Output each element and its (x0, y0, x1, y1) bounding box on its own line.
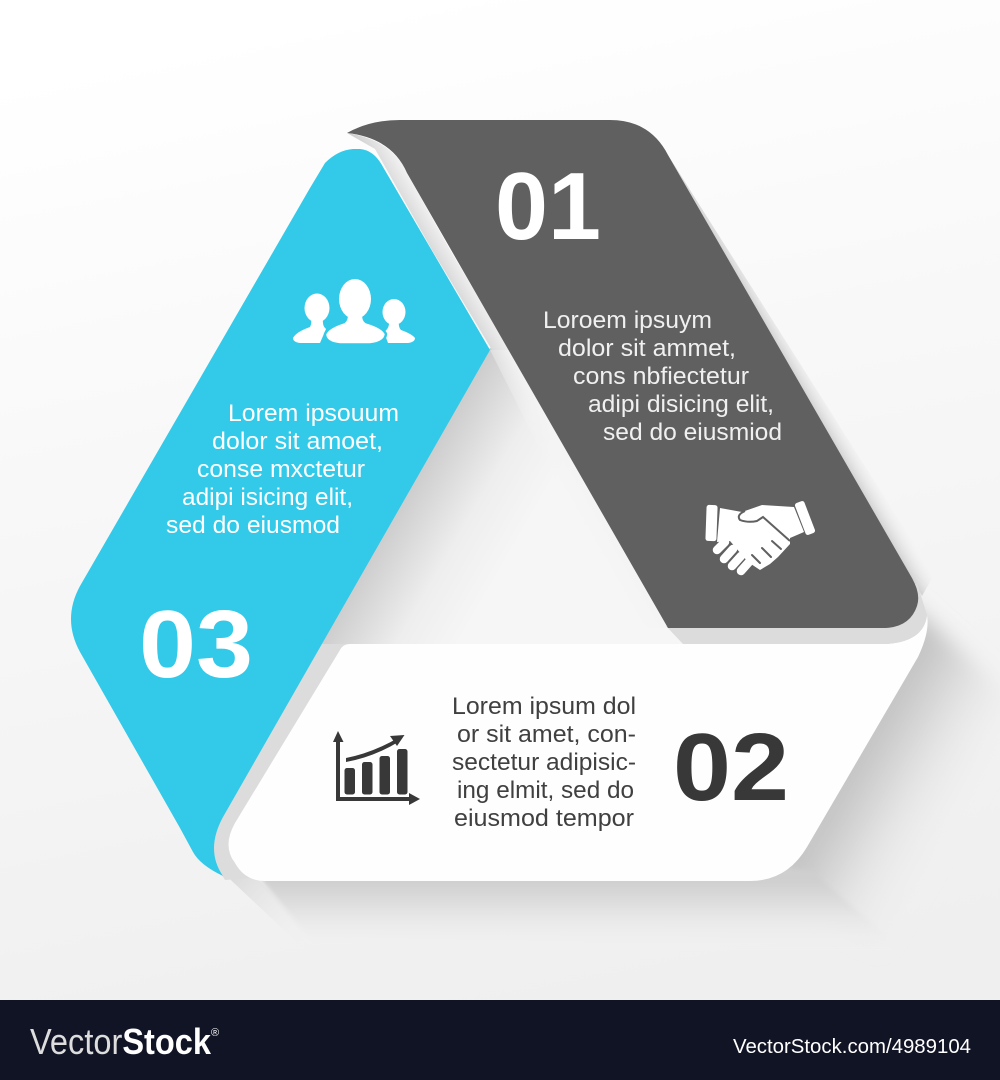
text block 02: eiusmod tempor (454, 805, 634, 832)
band: fold under dark segment (666, 583, 927, 644)
image id: VectorStock.com/4989104 (733, 1036, 971, 1058)
text block 01: Loroem ipsuym (543, 307, 712, 334)
icon: three people (293, 279, 415, 344)
registered mark: ® (211, 1027, 219, 1039)
band: fold beside white segment (212, 644, 350, 880)
number 02: 02 (673, 714, 789, 821)
text block 03: conse mxctetur (197, 456, 365, 483)
band: fold between blue and dark segments (347, 133, 510, 350)
number 03: 03 (139, 591, 253, 698)
panel 02: white segment (228, 583, 928, 881)
shadow: trailing tail at lower left (216, 858, 330, 950)
text block 01: dolor sit ammet, (558, 335, 736, 362)
icon: handshake (705, 500, 816, 571)
number 01: 01 (495, 153, 601, 260)
text block 01: adipi disicing elit, (588, 391, 774, 418)
text block 03: dolor sit amoet, (212, 428, 383, 455)
footer bar (0, 1000, 1000, 1080)
logo wordmark: VectorStock (30, 1021, 212, 1062)
text block 02: ing elmit, sed do (457, 777, 634, 804)
inner triangle shadow (318, 348, 684, 644)
shadow: right of dark segment (668, 155, 934, 596)
text block 03 (166, 400, 399, 539)
icon: bar chart with arrow (333, 731, 420, 805)
text block 02: sectetur adipisic- (452, 749, 636, 776)
text block 03: Lorem ipsouum (228, 400, 399, 427)
shadow: below white segment (253, 870, 905, 952)
panel 03: blue segment (71, 149, 490, 876)
text block 01: sed do eiusmiod (603, 419, 782, 446)
shadow: right of white segment (760, 590, 1000, 950)
inner triangle highlight along dark segment (490, 350, 668, 628)
text block 03: adipi isicing elit, (182, 484, 353, 511)
text block 03: sed do eiusmod (166, 512, 340, 539)
text block 01 (543, 307, 782, 446)
text block 01: cons nbfiectetur (573, 363, 749, 390)
text block 02: or sit amet, con- (457, 721, 636, 748)
text block 02: Lorem ipsum dol (452, 693, 636, 720)
panel 01: dark segment (347, 120, 918, 628)
text block 02 (452, 693, 636, 832)
